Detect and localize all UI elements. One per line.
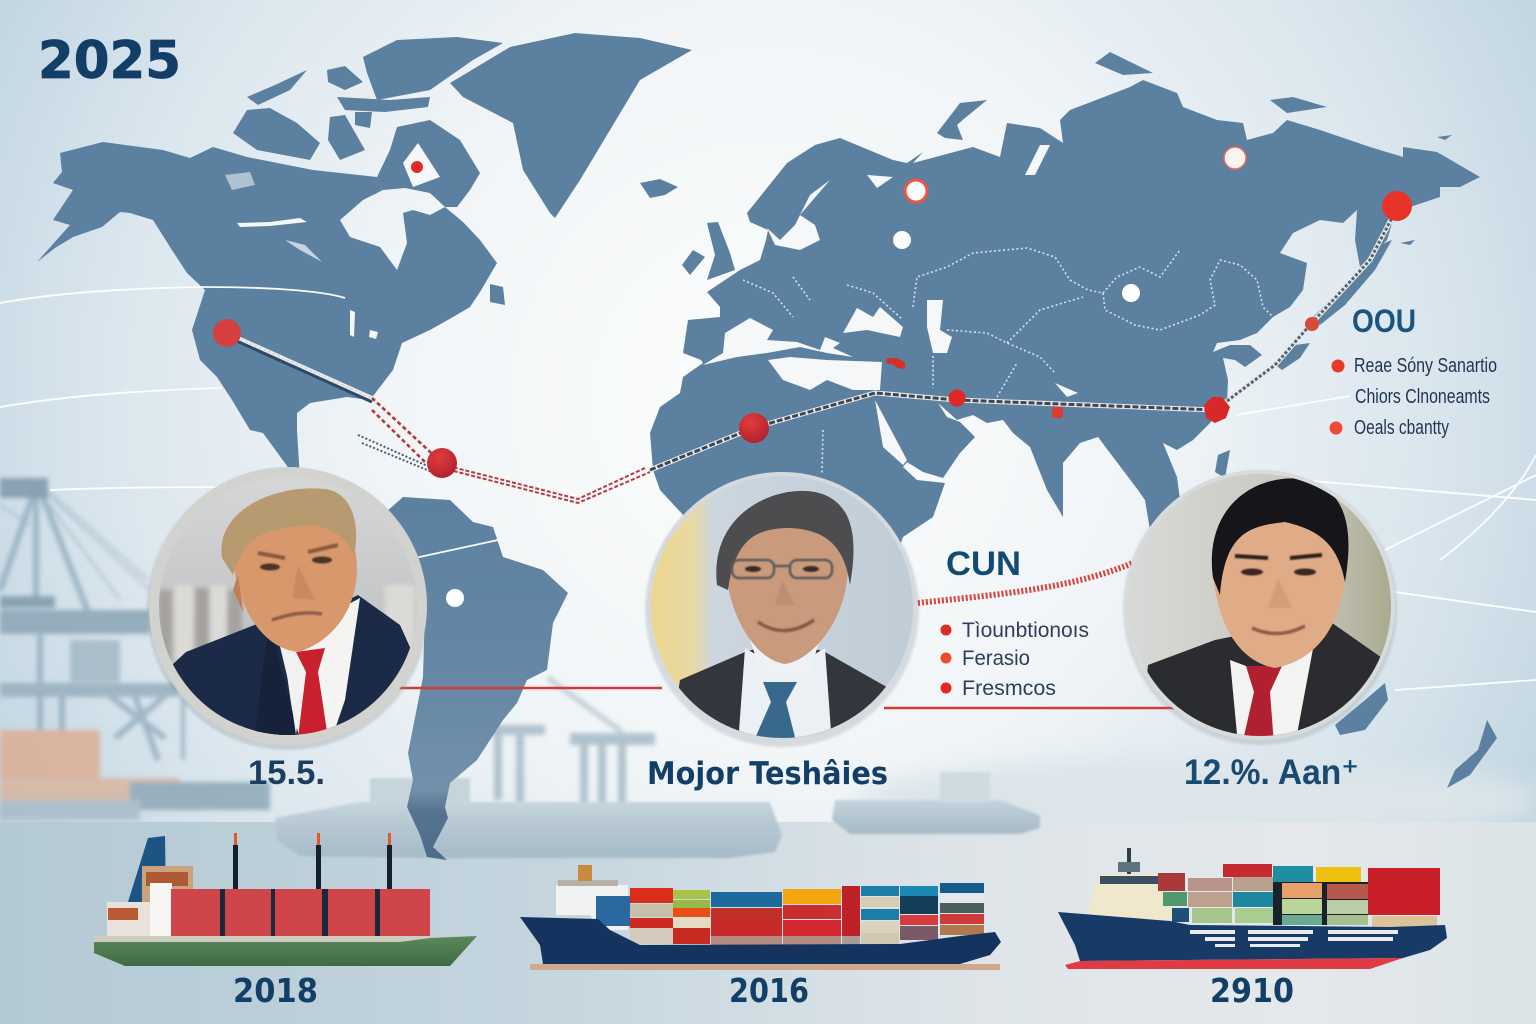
map markers: [213, 147, 1412, 607]
Eurasia and Africa: [650, 80, 1480, 640]
callout right: OOU list: Oeals cbantty: [1354, 417, 1449, 439]
ship 2016: [520, 865, 1001, 970]
ghost ships: [275, 772, 1040, 858]
ship year 2910: 2910: [1210, 971, 1294, 1010]
portrait left: [147, 467, 430, 750]
hazy port with cranes: [0, 478, 655, 820]
ship year 2018: 2018: [233, 971, 318, 1010]
ship year 2016: 2016: [729, 971, 809, 1010]
New Zealand: [1447, 720, 1497, 788]
stat label left: 15.5.: [248, 754, 325, 792]
Arctic islands: [233, 37, 503, 160]
thin white flight arcs: [0, 287, 1536, 690]
Japan and Sakhalin: [1273, 215, 1415, 370]
pool around Canada marker: [403, 143, 440, 187]
callout center: CUN list: CUN: [946, 545, 1021, 583]
Taiwan and Philippines: [1215, 450, 1230, 478]
Novaya Zemlya: [937, 100, 987, 140]
Iceland: [640, 179, 678, 198]
Baffin Island: [377, 120, 480, 207]
ship 2018: [94, 833, 477, 966]
shipping route: [227, 212, 1395, 708]
callout center: CUN list: Tìounbtionoıs: [962, 619, 1089, 642]
callout center: CUN list: Ferasio: [962, 647, 1030, 670]
callout right: OOU list: [1330, 303, 1497, 439]
callout center: CUN list: [940, 545, 1089, 700]
dotted borders: [743, 248, 1273, 473]
New Siberian Islands: [1270, 97, 1452, 140]
stat label right: 12.%. Aan⁺: [1184, 753, 1359, 792]
callout right: OOU list: Chiors Clnoneamts: [1355, 386, 1490, 408]
callout right: OOU list: OOU: [1352, 303, 1416, 339]
Greenland: [450, 33, 692, 218]
South America: [385, 497, 568, 860]
callout right: OOU list: Reae Sóny Sanartio: [1354, 355, 1497, 377]
Severnaya Zemlya: [1095, 52, 1153, 75]
world map: [37, 33, 1497, 860]
sea: [0, 822, 1536, 1024]
Newfoundland: [490, 284, 505, 305]
portrait center: [645, 472, 919, 747]
title year: 2025: [38, 31, 181, 91]
Australia: [1335, 683, 1388, 735]
callout center: CUN list: Fresmcos: [962, 677, 1056, 700]
portrait right: [1123, 470, 1397, 745]
ship 2910: [1058, 848, 1447, 969]
white inland water: [225, 143, 1078, 465]
stat label center: Mojor Teshâies: [647, 756, 888, 792]
North America: [37, 142, 497, 520]
hazy skyline right: [860, 758, 1536, 842]
British Isles: [682, 222, 735, 280]
